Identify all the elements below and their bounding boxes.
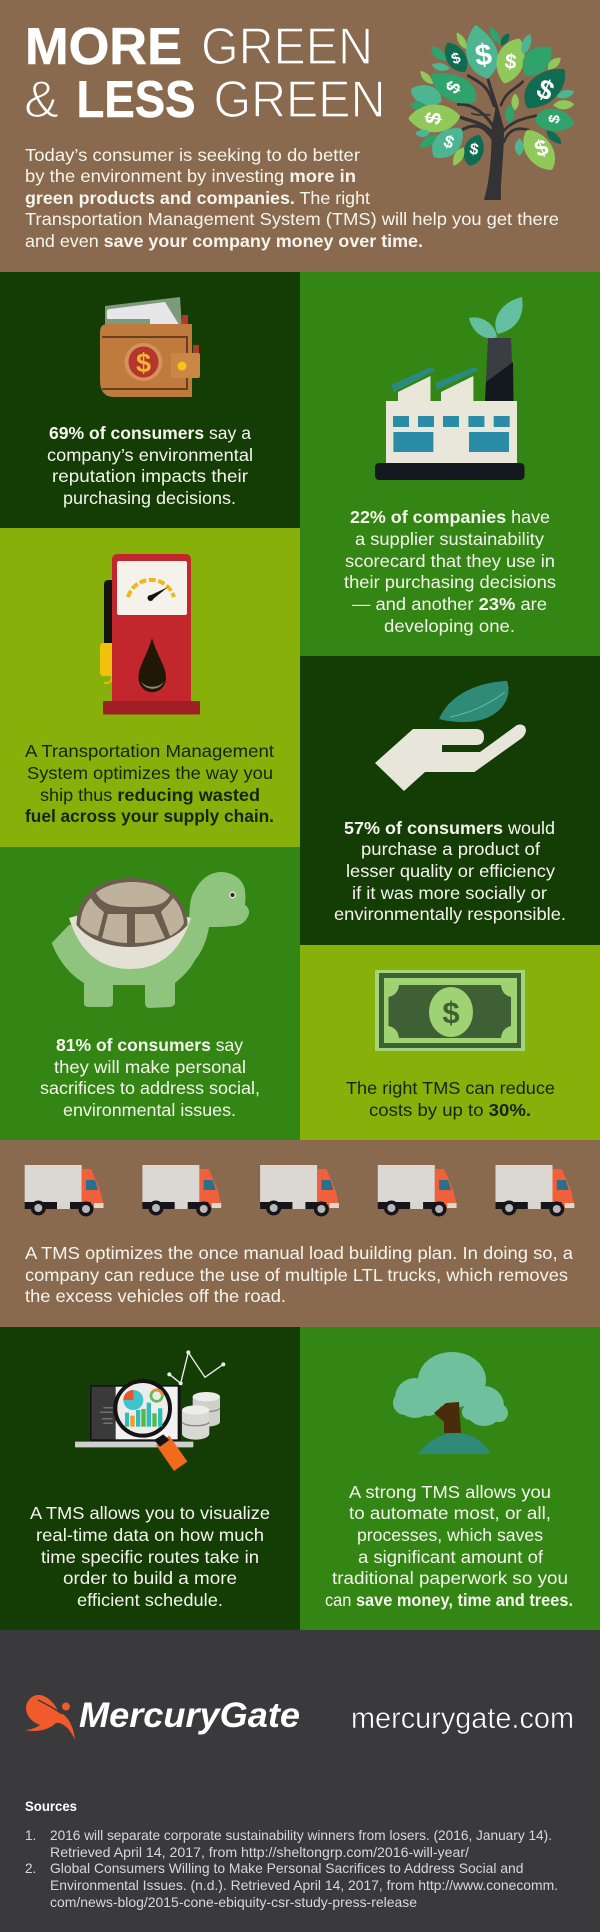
title: MORE <box>25 18 182 76</box>
title: GREEN <box>214 71 386 129</box>
text: paperwork: processes, which saves <box>357 1525 543 1545</box>
sources: Global Consumers Willing to Make Personal Sacrifices to Address Social and <box>50 1861 524 1876</box>
text: 81% of consumers: they will make personal <box>54 1057 246 1077</box>
intro text: Today’s consumer is seeking to do better <box>25 145 360 165</box>
text: cost reduction: costs by up to 30%. <box>369 1100 531 1120</box>
text: fuel: ship thus reducing wasted <box>40 785 260 805</box>
icon: money tree: $ <box>468 141 480 159</box>
sources: 2. <box>25 1861 36 1876</box>
icon: money tree: $ <box>532 72 559 107</box>
icon: money tree: $ <box>420 110 447 126</box>
text: 57% of consumers: if it was more socially or <box>352 883 547 903</box>
sources: Retrieved April 14, 2017, from http://sheltongrp.com/2016-will-year/ <box>50 1845 469 1860</box>
text: load building: A TMS optimizes the once manual load building plan. In doing so, a <box>25 1243 573 1263</box>
text: 22% of companies: their purchasing decisions <box>344 572 556 592</box>
text: 57% of consumers: 57% of consumers would <box>344 818 555 838</box>
intro text: Transportation Management System (TMS) will help you get there <box>25 209 559 229</box>
text: real-time data: A TMS allows you to visualize <box>30 1503 270 1523</box>
text: 22% of companies: scorecard that they use in <box>345 551 555 571</box>
website: mercurygate.com <box>351 1702 574 1735</box>
panel: 57% of consumers <box>300 656 600 945</box>
title: & <box>24 71 59 129</box>
logo: MercuryGate: MercuryGate <box>79 1696 300 1735</box>
panel: 22% of companies <box>300 272 600 656</box>
text: paperwork: traditional paperwork so you <box>332 1568 568 1588</box>
text: 22% of companies: 22% of companies have <box>350 507 550 527</box>
text: real-time data: order to build a more <box>63 1568 237 1588</box>
text: 81% of consumers <box>40 1035 260 1120</box>
sources: 2016 will separate corporate sustainability winners from losers. (2016, January 14). <box>50 1828 552 1843</box>
icon: laptop and magnifier <box>75 1350 225 1471</box>
text: paperwork: can save money, time and trees. <box>325 1590 573 1610</box>
text: 57% of consumers: purchase a product of <box>361 839 540 859</box>
title <box>24 18 386 129</box>
text: 69% of consumers: 69% of consumers say a <box>49 423 251 443</box>
panel: paperwork <box>300 1327 600 1630</box>
panel: real-time data <box>0 1327 300 1630</box>
panel: cost reduction <box>300 945 600 1140</box>
icon: truck 3 <box>260 1165 339 1216</box>
panel: 69% of consumers <box>0 272 300 528</box>
text: 22% of companies: a supplier sustainability <box>355 529 544 549</box>
icon: money tree: $ <box>442 78 466 98</box>
text: 69% of consumers: reputation impacts their <box>52 466 248 486</box>
sources: Sources <box>25 1799 77 1814</box>
text: 22% of companies: — and another 23% are <box>352 594 547 614</box>
icon: money tree <box>411 28 573 200</box>
icon: wallet <box>100 297 200 397</box>
icon: dollar bill <box>375 970 525 1051</box>
icon: truck 1 <box>25 1165 104 1216</box>
sources <box>25 1799 558 1910</box>
logo: MercuryGate <box>25 1695 300 1740</box>
text: 69% of consumers <box>47 423 253 508</box>
panel: header <box>0 0 600 272</box>
panel: footer <box>0 1630 600 1932</box>
text: paperwork <box>325 1482 573 1610</box>
icon: fuel pump <box>100 554 200 714</box>
sources: com/news-blog/2015-cone-ebiquity-csr-study-press-release <box>50 1895 417 1910</box>
text: load building: company can reduce the use of multiple LTL trucks, which removes <box>25 1265 568 1285</box>
text: cost reduction <box>346 1078 555 1120</box>
icon: tree <box>393 1352 508 1454</box>
text: load building <box>25 1243 573 1306</box>
icon: hand holding leaf <box>375 681 526 791</box>
icon: truck 5 <box>496 1165 574 1216</box>
panel: trucks <box>0 1140 600 1327</box>
intro text <box>25 145 559 251</box>
text: paperwork: to automate most, or all, <box>349 1503 551 1523</box>
icon: dollar bill: $ <box>442 995 460 1030</box>
text: fuel <box>25 741 274 826</box>
text: real-time data: time specific routes take in <box>41 1547 259 1567</box>
intro text: and even save your company money over time. <box>25 231 423 251</box>
icon: wallet: $ <box>136 348 151 378</box>
icon: money tree: $ <box>531 133 552 162</box>
icon: money tree: $ <box>504 50 518 74</box>
text: real-time data: efficient schedule. <box>77 1590 223 1610</box>
text: cost reduction: The right TMS can reduce <box>346 1078 555 1098</box>
text: 81% of consumers: 81% of consumers say <box>56 1035 243 1055</box>
panel: fuel <box>0 528 300 847</box>
text: 69% of consumers: purchasing decisions. <box>63 488 236 508</box>
sources: 1. <box>25 1828 36 1843</box>
icon: money tree: $ <box>473 38 494 73</box>
icon: turtle <box>52 872 249 1008</box>
text: 81% of consumers: sacrifices to address social, <box>40 1078 260 1098</box>
intro text: green products and companies. The right <box>25 188 370 208</box>
icon: money tree: $ <box>449 49 464 68</box>
text: fuel: A Transportation Management <box>25 741 274 761</box>
panel: 81% of consumers <box>0 847 300 1140</box>
text: paperwork: A strong TMS allows you <box>349 1482 551 1502</box>
text: 57% of consumers <box>334 818 566 924</box>
text: fuel: System optimizes the way you <box>27 763 273 783</box>
text: 81% of consumers: environmental issues. <box>63 1100 236 1120</box>
icon: factory with leaves <box>375 297 524 480</box>
icon: truck 2 <box>142 1165 221 1216</box>
text: paperwork: a significant amount of <box>358 1547 543 1567</box>
icon: truck 4 <box>378 1165 457 1216</box>
text: real-time data: real-time data on how much <box>36 1525 264 1545</box>
text: real-time data <box>30 1503 270 1610</box>
text: 22% of companies <box>344 507 556 636</box>
text: fuel: fuel across your supply chain. <box>25 806 274 826</box>
text: 57% of consumers: lesser quality or efficiency <box>346 861 555 881</box>
title: LESS <box>76 71 196 129</box>
title: GREEN <box>201 18 373 76</box>
text: load building: the excess vehicles off the road. <box>25 1286 286 1306</box>
text: 57% of consumers: environmentally responsible. <box>334 904 566 924</box>
icon: money tree: $ <box>441 131 457 153</box>
sources: Environmental Issues. (n.d.). Retrieved April 14, 2017, from http://www.conecomm. <box>50 1878 558 1893</box>
intro text: by the environment by investing more in <box>25 166 356 186</box>
text: 22% of companies: developing one. <box>384 616 515 636</box>
icon: money tree: $ <box>546 113 564 125</box>
text: 69% of consumers: company’s environmental <box>47 445 253 465</box>
